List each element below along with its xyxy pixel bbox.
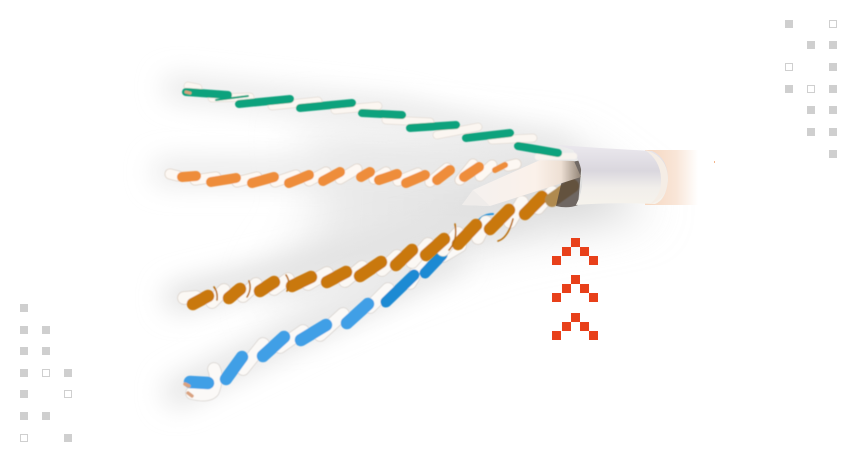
wire pair: green xyxy=(186,86,574,157)
wire pair: blue xyxy=(185,214,493,396)
decorative pixel grid: bottom left xyxy=(20,304,72,442)
cable jacket xyxy=(645,150,715,205)
icon: red pixel chevrons xyxy=(552,238,598,340)
chevron 3 xyxy=(552,313,598,340)
white flap of the shield xyxy=(462,160,581,206)
decorative pixel grid: top right xyxy=(785,20,837,158)
chevron 2 xyxy=(552,275,598,302)
wire pair: brown xyxy=(184,186,572,304)
chevron 1 xyxy=(552,238,598,265)
wire pair: orange xyxy=(170,164,516,183)
foil shield xyxy=(556,145,668,207)
soft shadow behind the wires xyxy=(165,88,650,392)
